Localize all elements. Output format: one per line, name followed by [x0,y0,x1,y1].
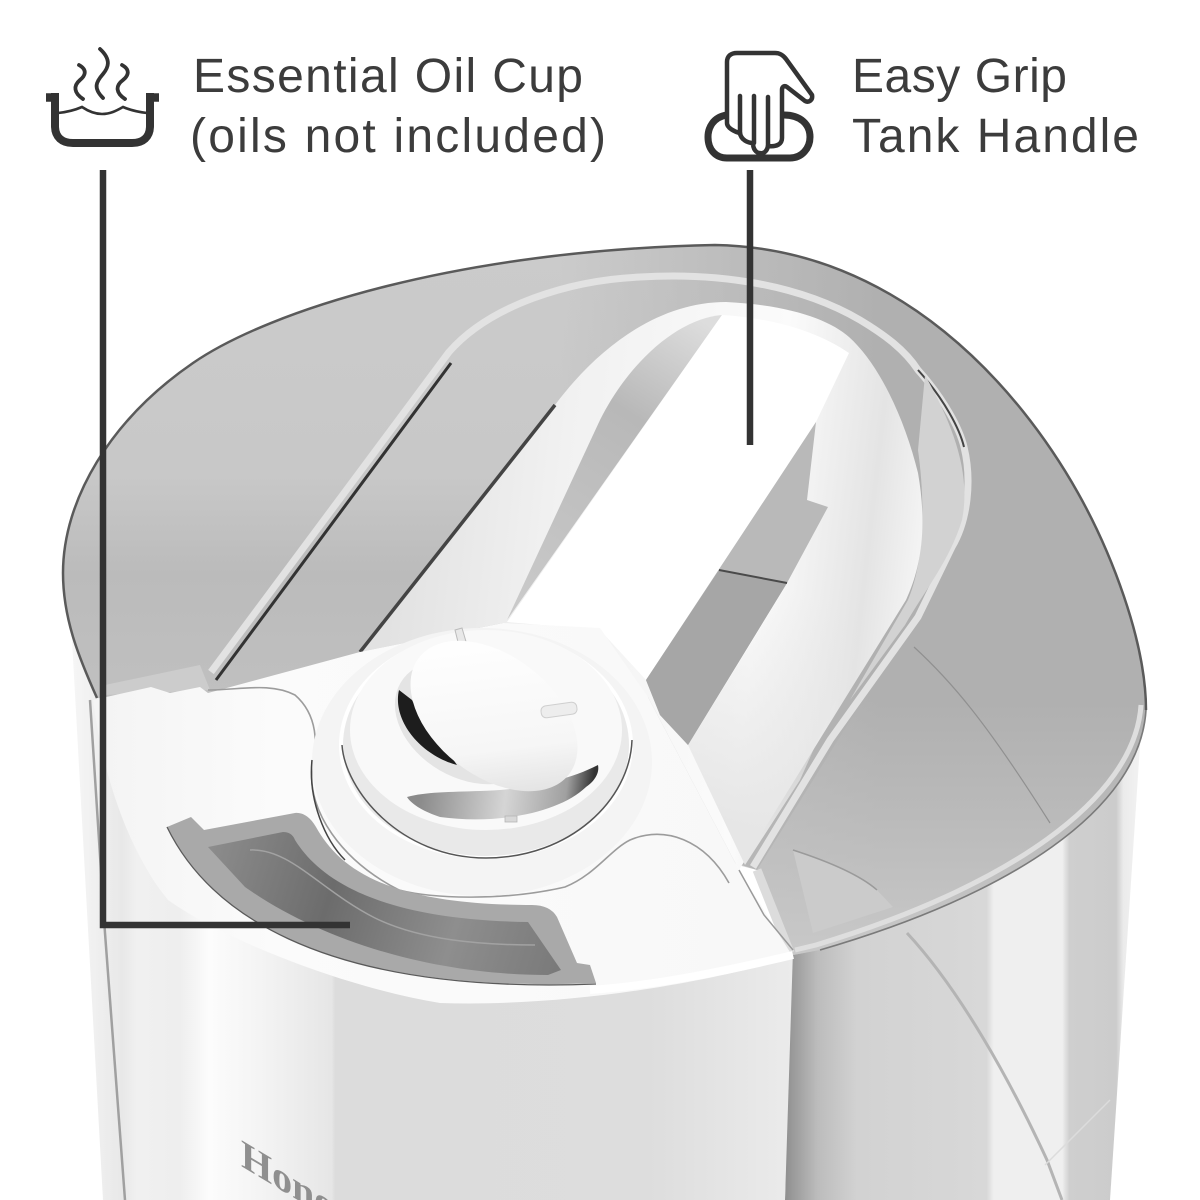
notch at top of nozzle [455,628,467,646]
heading: easy grip tank handle: Easy Grip [852,50,1067,103]
cup well [208,832,561,975]
heading: essential oil cup: Essential Oil Cup [193,50,583,103]
icon: hand gripping handle [708,53,812,158]
heading: essential oil cup: (oils not included) [190,110,606,163]
water visible through opening [646,570,787,745]
handle opening [646,422,828,745]
essential oil cup [167,813,596,985]
lid ridge and handle surround [211,276,968,867]
lower notch [505,816,517,822]
top deck [93,623,793,1003]
tank lid, grey translucent top [63,245,1146,955]
central mist nozzle [311,610,652,896]
upper vent slit [398,690,457,765]
white base body front [72,640,793,1200]
heading: essential oil cup [190,50,606,163]
easy grip tank handle [360,302,922,870]
heading: easy grip tank handle: Tank Handle [852,110,1139,163]
inner collar [372,635,564,809]
icon: steaming oil bowl [46,49,159,143]
handle grey wedge [507,315,722,620]
pointer line: tank handle [747,170,753,445]
cap tab [540,702,578,718]
heading: easy grip tank handle [852,50,1139,163]
handle white bar [507,315,849,680]
transparent water tank body [785,690,1143,1200]
lower vent slit [407,765,598,819]
nozzle cap [382,610,606,822]
pointer line: essential oil cup [103,170,350,925]
